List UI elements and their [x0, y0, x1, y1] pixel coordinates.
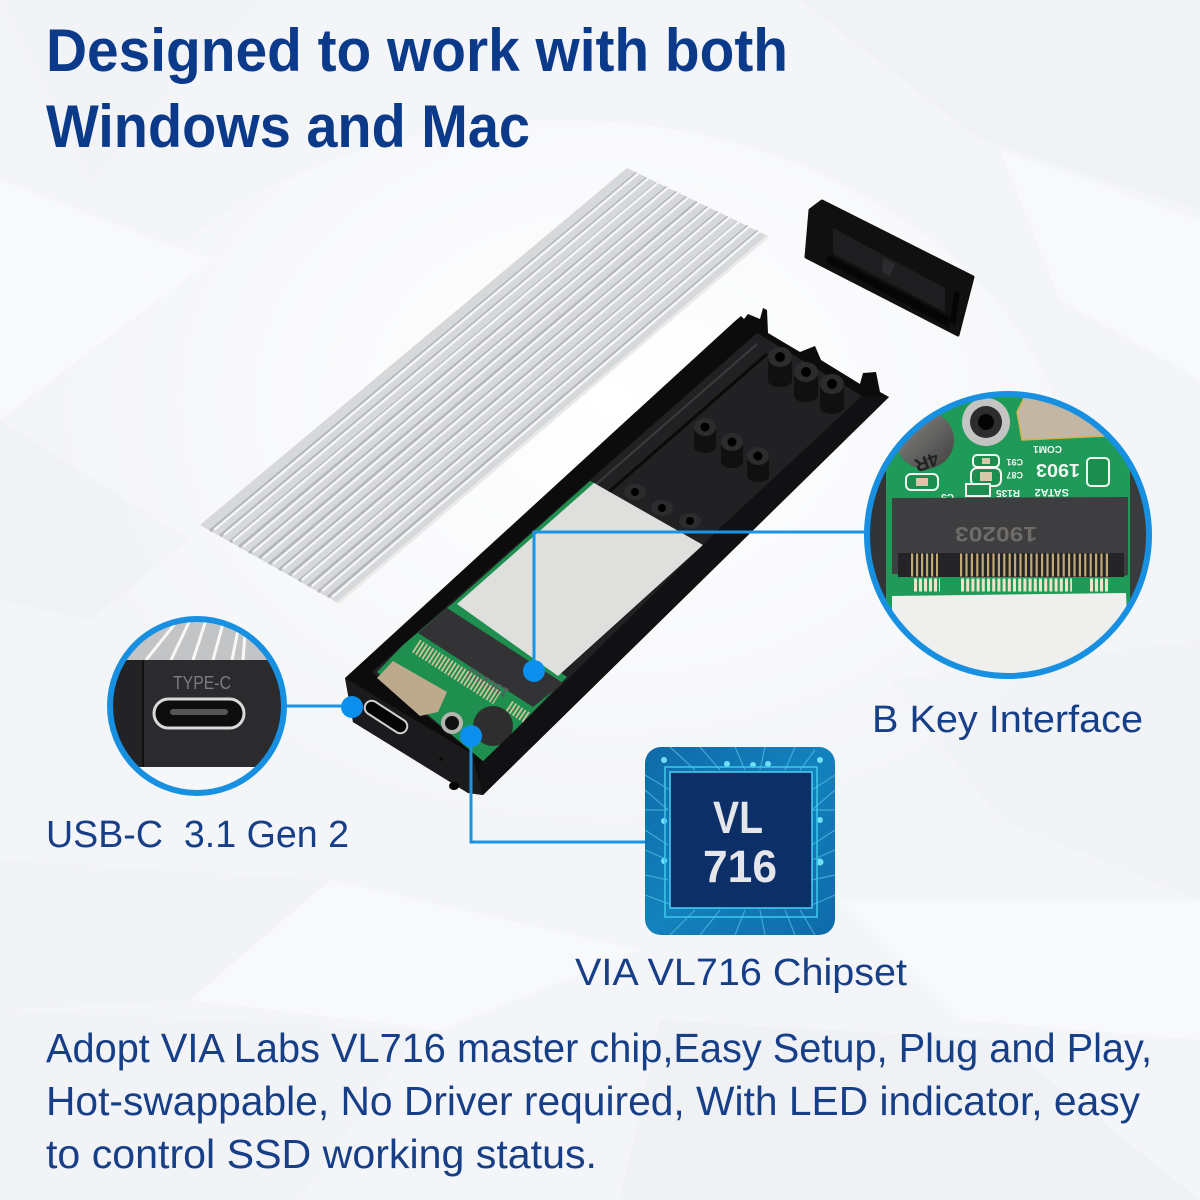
callout circle: B key socket: 4R [911, 447, 941, 475]
description paragraph [46, 1025, 1152, 1177]
board metal shell [1017, 396, 1105, 440]
silkscreen labels [942, 446, 1079, 498]
silkscreen labels: COM1 [1033, 443, 1062, 454]
callout circle: USB-C port [107, 617, 287, 795]
B key socket [416, 608, 563, 718]
silkscreen labels: SATA2 [1035, 486, 1069, 498]
inductor [898, 415, 954, 469]
silkscreen labels: C5 [941, 491, 954, 502]
audio jack [962, 398, 1010, 446]
callout circle: USB-C port: TYPE-C [173, 673, 231, 693]
inductor [473, 706, 513, 746]
enclosure outer shell [345, 308, 889, 795]
side wall [478, 396, 889, 795]
green circuit board [377, 481, 597, 762]
black enclosure body [345, 308, 889, 795]
USB-C metal shell on board [377, 661, 447, 716]
callout circle: B key socket [864, 392, 1152, 680]
silkscreen labels: 1903 [1036, 460, 1080, 480]
black end cap [806, 201, 973, 335]
audio jack [441, 712, 463, 734]
description paragraph: to control SSD working status. [46, 1131, 597, 1177]
B key socket: 190203 [463, 665, 511, 701]
description paragraph: Adopt VIA Labs VL716 master chip,Easy Setup, Plug and Play, [46, 1025, 1152, 1071]
socket gold pins [911, 554, 938, 576]
circuit traces [645, 747, 835, 935]
socket body [892, 497, 1128, 577]
chip icon: VL716 [645, 747, 835, 935]
callout circle: B key socket: 190203 [955, 522, 1037, 545]
title: Windows and Mac [46, 93, 530, 160]
title [46, 17, 788, 160]
label: USB-C 3.1 Gen 2: USB-C 3.1 Gen 2 [46, 814, 349, 856]
screw standoffs [624, 347, 844, 529]
label: B Key Interface: B Key Interface [872, 699, 1143, 741]
chip icon: VL716: VL [713, 792, 763, 843]
chip icon: VL716: 716 [703, 841, 777, 892]
LED marks on front face [439, 757, 459, 790]
board components [906, 455, 1109, 496]
description paragraph: Hot-swappable, No Driver required, With LED indicator, easy [46, 1078, 1140, 1124]
front face [345, 678, 483, 795]
silkscreen labels: C91 [1006, 457, 1023, 467]
title: Designed to work with both [46, 17, 788, 84]
aluminium heat sink [200, 168, 768, 603]
enclosure floor [372, 333, 862, 765]
board solder pads [914, 578, 940, 592]
connector lines and dots [287, 532, 866, 842]
silkscreen labels: R135 [996, 487, 1020, 498]
label: VIA VL716 Chipset: VIA VL716 Chipset [575, 952, 907, 994]
silkscreen labels: C87 [1006, 470, 1023, 480]
thermal pad [457, 483, 703, 676]
USB-C port opening [362, 698, 410, 736]
